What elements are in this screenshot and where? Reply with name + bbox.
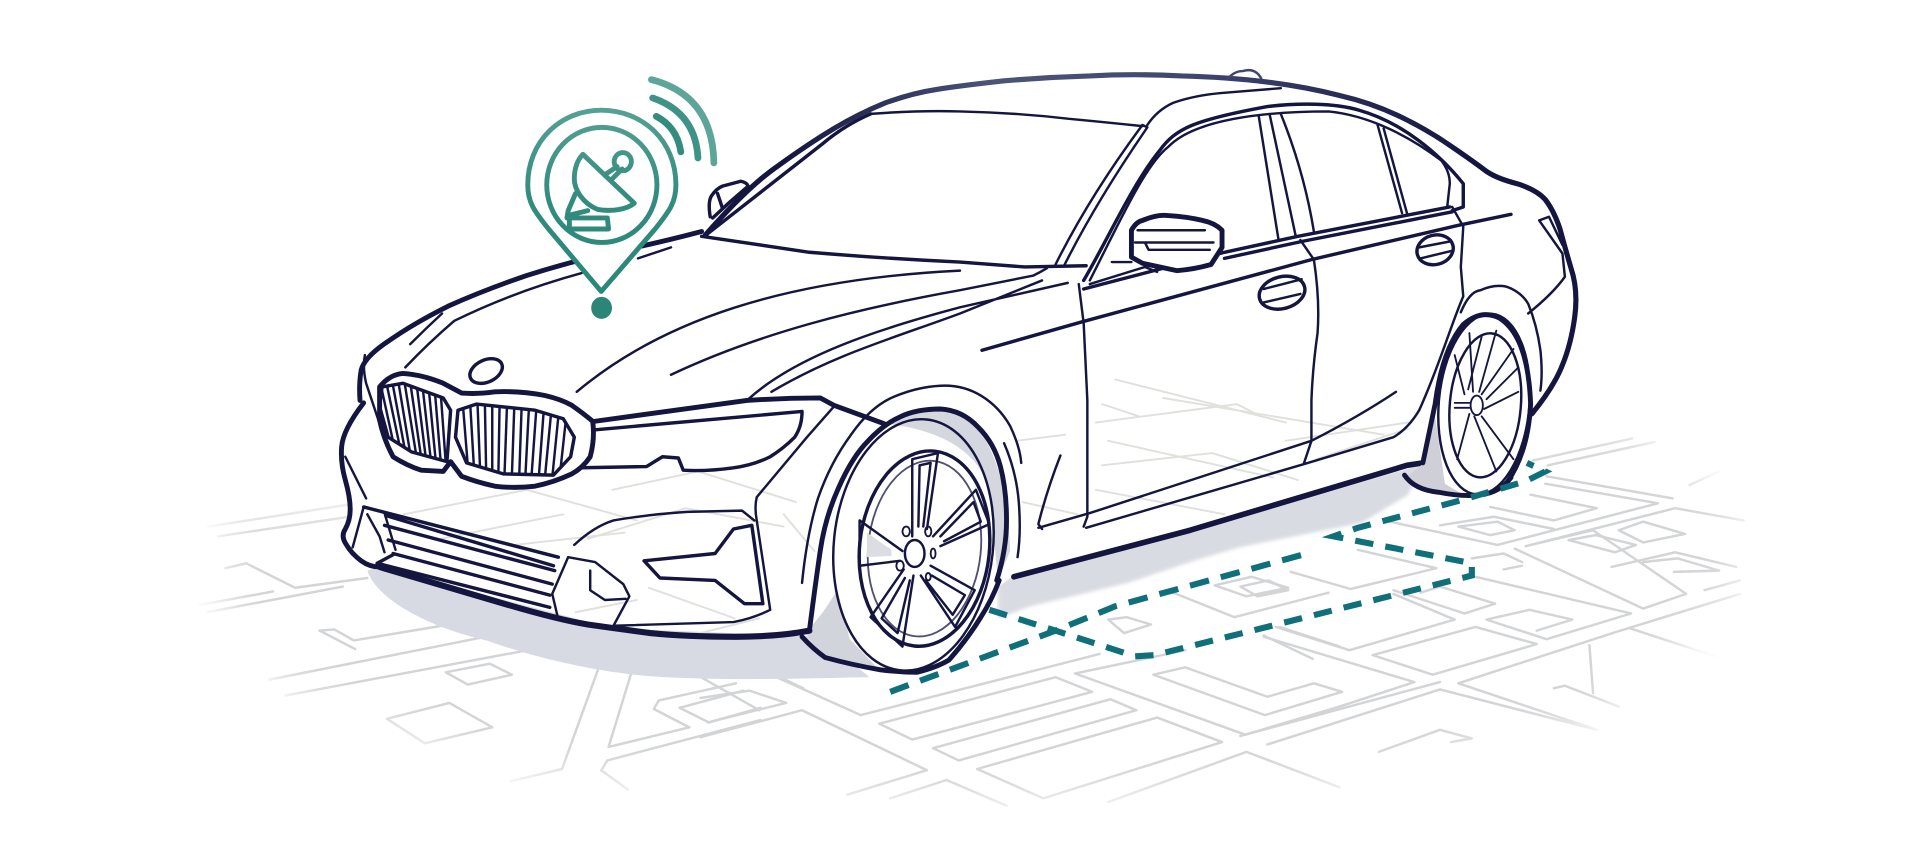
rear wheel arch and trunk [1461,217,1565,391]
car ground shadows [367,463,1423,679]
windshield outer [709,114,871,233]
route loop [989,463,1545,656]
door pillars [1259,114,1407,239]
satellite dish [567,153,634,229]
fender outer arch [802,386,1021,583]
door handle front [1255,271,1309,314]
rear arch thick [1423,315,1531,484]
window frame outer [1084,104,1463,280]
grille right inner [456,404,574,475]
rim outer [850,444,999,653]
feed ball [614,153,631,171]
sill thick line [1014,463,1423,577]
bumper bottom lip [380,567,809,637]
tire fills [802,409,1007,672]
door reflections of map [1016,380,1408,514]
rear tire [1404,310,1537,498]
grille slats left [382,385,446,460]
fender inner arch [1004,443,1020,557]
satellite location pin [528,80,714,319]
rear hub [1471,396,1483,415]
rear tire inner [1431,310,1537,498]
pin outline [528,110,676,291]
shadow: side of car [998,463,1423,618]
dish [574,154,634,210]
hood left creases [405,247,671,367]
front wheel arch [809,409,1007,631]
headlight inner [582,411,802,471]
windshield top [871,111,1142,126]
hood creases [577,268,1068,400]
star vent [644,525,763,604]
rear rim [1444,330,1527,480]
front door edge [1079,284,1087,527]
pin inner ring [547,127,657,242]
roof line [705,75,1576,414]
body crease [982,214,1511,350]
door lower line [1038,392,1396,529]
fog surround left [353,507,396,552]
tire shading [806,590,879,670]
left spoke shading [867,533,891,557]
door divider [1300,240,1318,463]
signal arc inner [656,116,681,152]
hood outline [360,231,702,400]
grille left inner [380,383,451,462]
mirror body [1131,215,1222,271]
wheel arch shading [888,412,1010,580]
rear shading [1406,416,1463,495]
fog lamp housing [552,557,629,626]
door handle rear [1414,231,1457,269]
dashed route [890,463,1545,692]
rear tire bottom [1404,475,1511,496]
hood left edge [364,355,380,424]
beltline [1084,207,1452,289]
air intake [574,511,754,545]
signal arc middle [653,98,698,158]
front bumper outline [341,403,380,567]
tire bottom edge [802,580,999,672]
mirror details [1090,230,1213,284]
headlight top [595,398,884,424]
hood base line [702,236,1086,267]
pedestal [567,193,609,229]
side mirror [1090,215,1222,284]
reflections on bumper [404,471,814,637]
a-pillar [1056,88,1281,266]
tire inner ellipse [821,411,1006,679]
front tire [802,411,1006,679]
rim inner [859,455,990,642]
fender line [613,407,834,626]
hub bolts [896,527,936,580]
signal arc outer [651,80,714,163]
headlight [582,398,884,471]
feed arm [606,167,622,179]
car body [340,70,1578,679]
lower air dam [353,507,558,607]
illustration: car on map with satellite pin [207,68,1745,807]
air dam bars [364,507,558,607]
hub [905,540,924,567]
kidney grille surround [380,373,593,487]
signal arcs [651,80,714,163]
rear door edge [1086,207,1463,528]
shadow: front of car [367,567,869,679]
grille slats right [463,404,566,478]
window frame inner [1090,111,1450,280]
body white fill [340,73,1578,632]
spokes [860,453,989,647]
left mirror [709,181,748,218]
front bumper side crease [345,457,366,498]
roof antenna [1228,70,1261,78]
street map background [200,438,1744,806]
route segment to front [890,552,1311,692]
pin dot [591,297,612,319]
logo [466,354,506,388]
